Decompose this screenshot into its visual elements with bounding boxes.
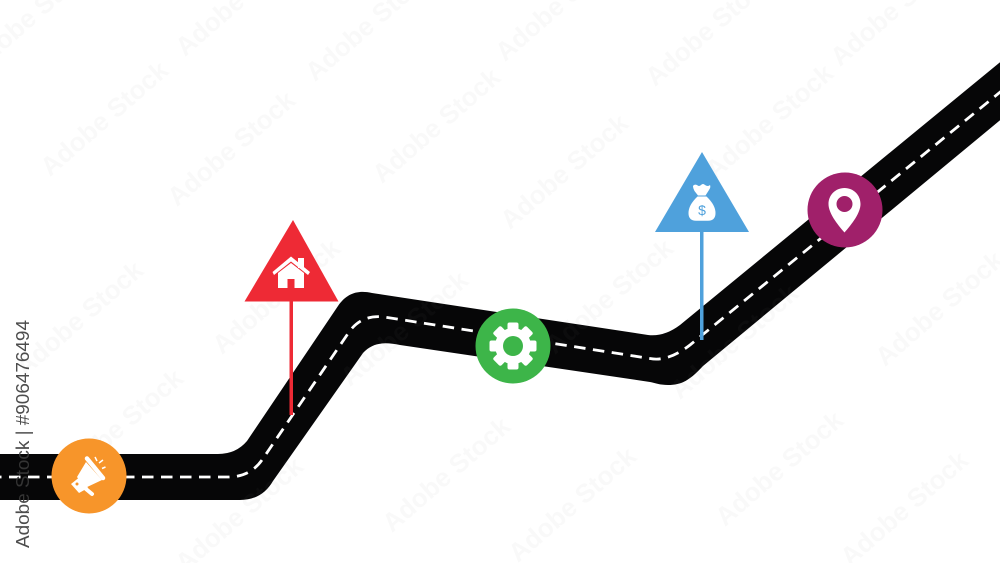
watermark: Adobe Stock tiled pattern: Adobe Stock bbox=[49, 362, 189, 490]
watermark: Adobe Stock tiled pattern: Adobe Stock bbox=[699, 57, 839, 185]
watermark: Adobe Stock tiled pattern: Adobe Stock bbox=[539, 232, 679, 360]
icon: money bag bbox=[688, 184, 716, 221]
sign: blue triangle with money bag bbox=[655, 152, 749, 340]
icon: megaphone bbox=[71, 457, 106, 494]
milestone: purple circle with location pin bbox=[808, 172, 882, 248]
watermark: Adobe Stock tiled pattern: Adobe Stock bbox=[664, 277, 804, 405]
watermark: Adobe Stock tiled pattern: Adobe Stock bbox=[334, 264, 474, 392]
milestone: orange circle with megaphone bbox=[52, 438, 126, 514]
icon: gear bbox=[490, 322, 536, 370]
milestone: green circle with gear bbox=[476, 308, 550, 384]
watermark: Adobe Stock tiled pattern: Adobe Stock bbox=[161, 84, 301, 212]
watermark: Adobe Stock tiled pattern: Adobe Stock bbox=[376, 410, 516, 538]
icon: money bag: $ bbox=[698, 202, 706, 218]
watermark: vertical stock id: Adobe Stock | #906476494 bbox=[12, 320, 33, 548]
icon: house bbox=[272, 256, 310, 288]
watermark: Adobe Stock tiled pattern: Adobe Stock bbox=[366, 61, 506, 189]
watermark: Adobe Stock tiled pattern: Adobe Stock bbox=[709, 404, 849, 532]
watermark: Adobe Stock tiled pattern: Adobe Stock bbox=[206, 232, 346, 360]
road bbox=[0, 54, 1000, 500]
watermark: Adobe Stock tiled pattern: Adobe Stock bbox=[9, 254, 149, 382]
sign: red triangle with house bbox=[244, 220, 338, 415]
watermark: Adobe Stock tiled pattern: Adobe Stock bbox=[494, 107, 634, 235]
icon: location pin bbox=[828, 188, 860, 232]
watermark: Adobe Stock tiled pattern: Adobe Stock bbox=[34, 54, 174, 182]
